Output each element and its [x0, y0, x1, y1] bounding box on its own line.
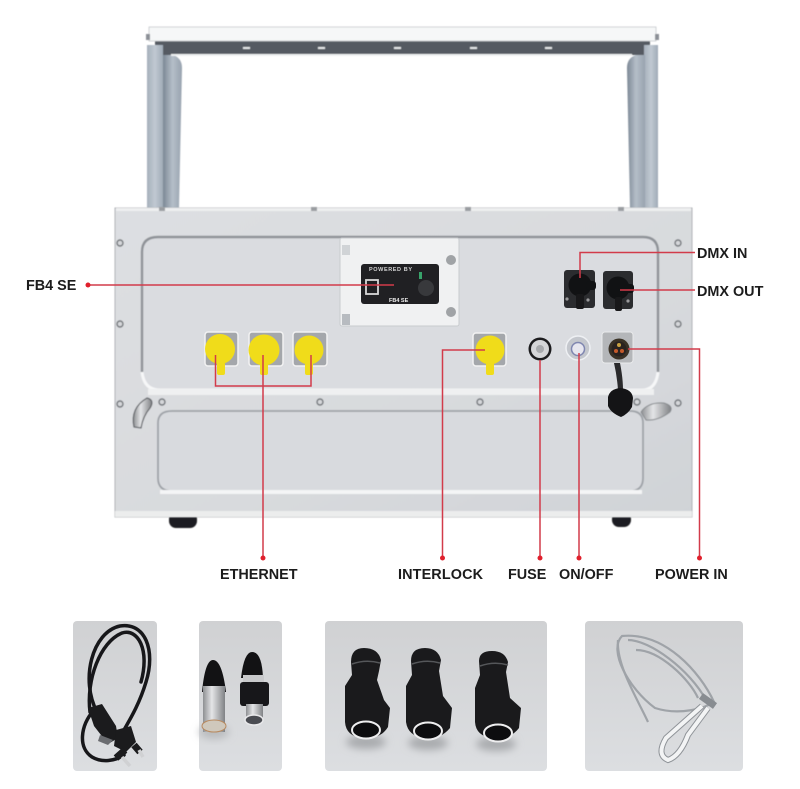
- lower recessed panel: [158, 411, 643, 491]
- connector: ethernet sockets: [205, 332, 327, 375]
- screws: [117, 240, 681, 407]
- connector: DMX IN socket: [564, 270, 596, 309]
- connector: power in with cap: [602, 332, 633, 417]
- handle left: [133, 398, 152, 428]
- callout: INTERLOCK: INTERLOCK: [398, 567, 484, 583]
- accessory card: power cable: [73, 621, 157, 771]
- callout: DMX IN: DMX IN: [697, 246, 747, 262]
- connector: on/off switch: [566, 336, 590, 360]
- connector: fuse: [528, 338, 552, 360]
- handle right: [641, 403, 671, 420]
- callout: FUSE: [508, 360, 547, 583]
- connector: DMX OUT socket: [603, 271, 634, 311]
- accessory card: DMX XLR plugs: [199, 621, 282, 771]
- callout: FB4 SE: [26, 278, 394, 294]
- callout: INTERLOCK: [398, 350, 485, 583]
- feet: [169, 512, 631, 528]
- callout: ETHERNET: ETHERNET: [220, 567, 298, 583]
- callout: FB4 SE: FB4 SE: [26, 278, 77, 294]
- display module: FB4 SE: FB4 SE: [389, 298, 409, 304]
- callout: FUSE: FUSE: [508, 567, 547, 583]
- display module: FB4 SE: POWERED BY: [369, 267, 413, 273]
- callout: ETHERNET: [216, 355, 311, 583]
- callout: ON/OFF: ON/OFF: [559, 567, 614, 583]
- hanging bracket: [146, 27, 659, 208]
- accessory card: three waterproof connectors: [325, 621, 547, 771]
- connector: interlock socket: [473, 333, 506, 375]
- callout: POWER IN: POWER IN: [655, 567, 728, 583]
- callout: DMX IN: [580, 246, 747, 278]
- device rear panel: [115, 207, 692, 517]
- display module: FB4 SE: [340, 238, 459, 326]
- accessory card: safety cable with carabiner: [585, 621, 743, 771]
- callout: DMX OUT: DMX OUT: [697, 284, 764, 300]
- upper recessed panel: [142, 237, 658, 388]
- callout: ON/OFF: [559, 353, 614, 583]
- callout: POWER IN: [628, 349, 728, 583]
